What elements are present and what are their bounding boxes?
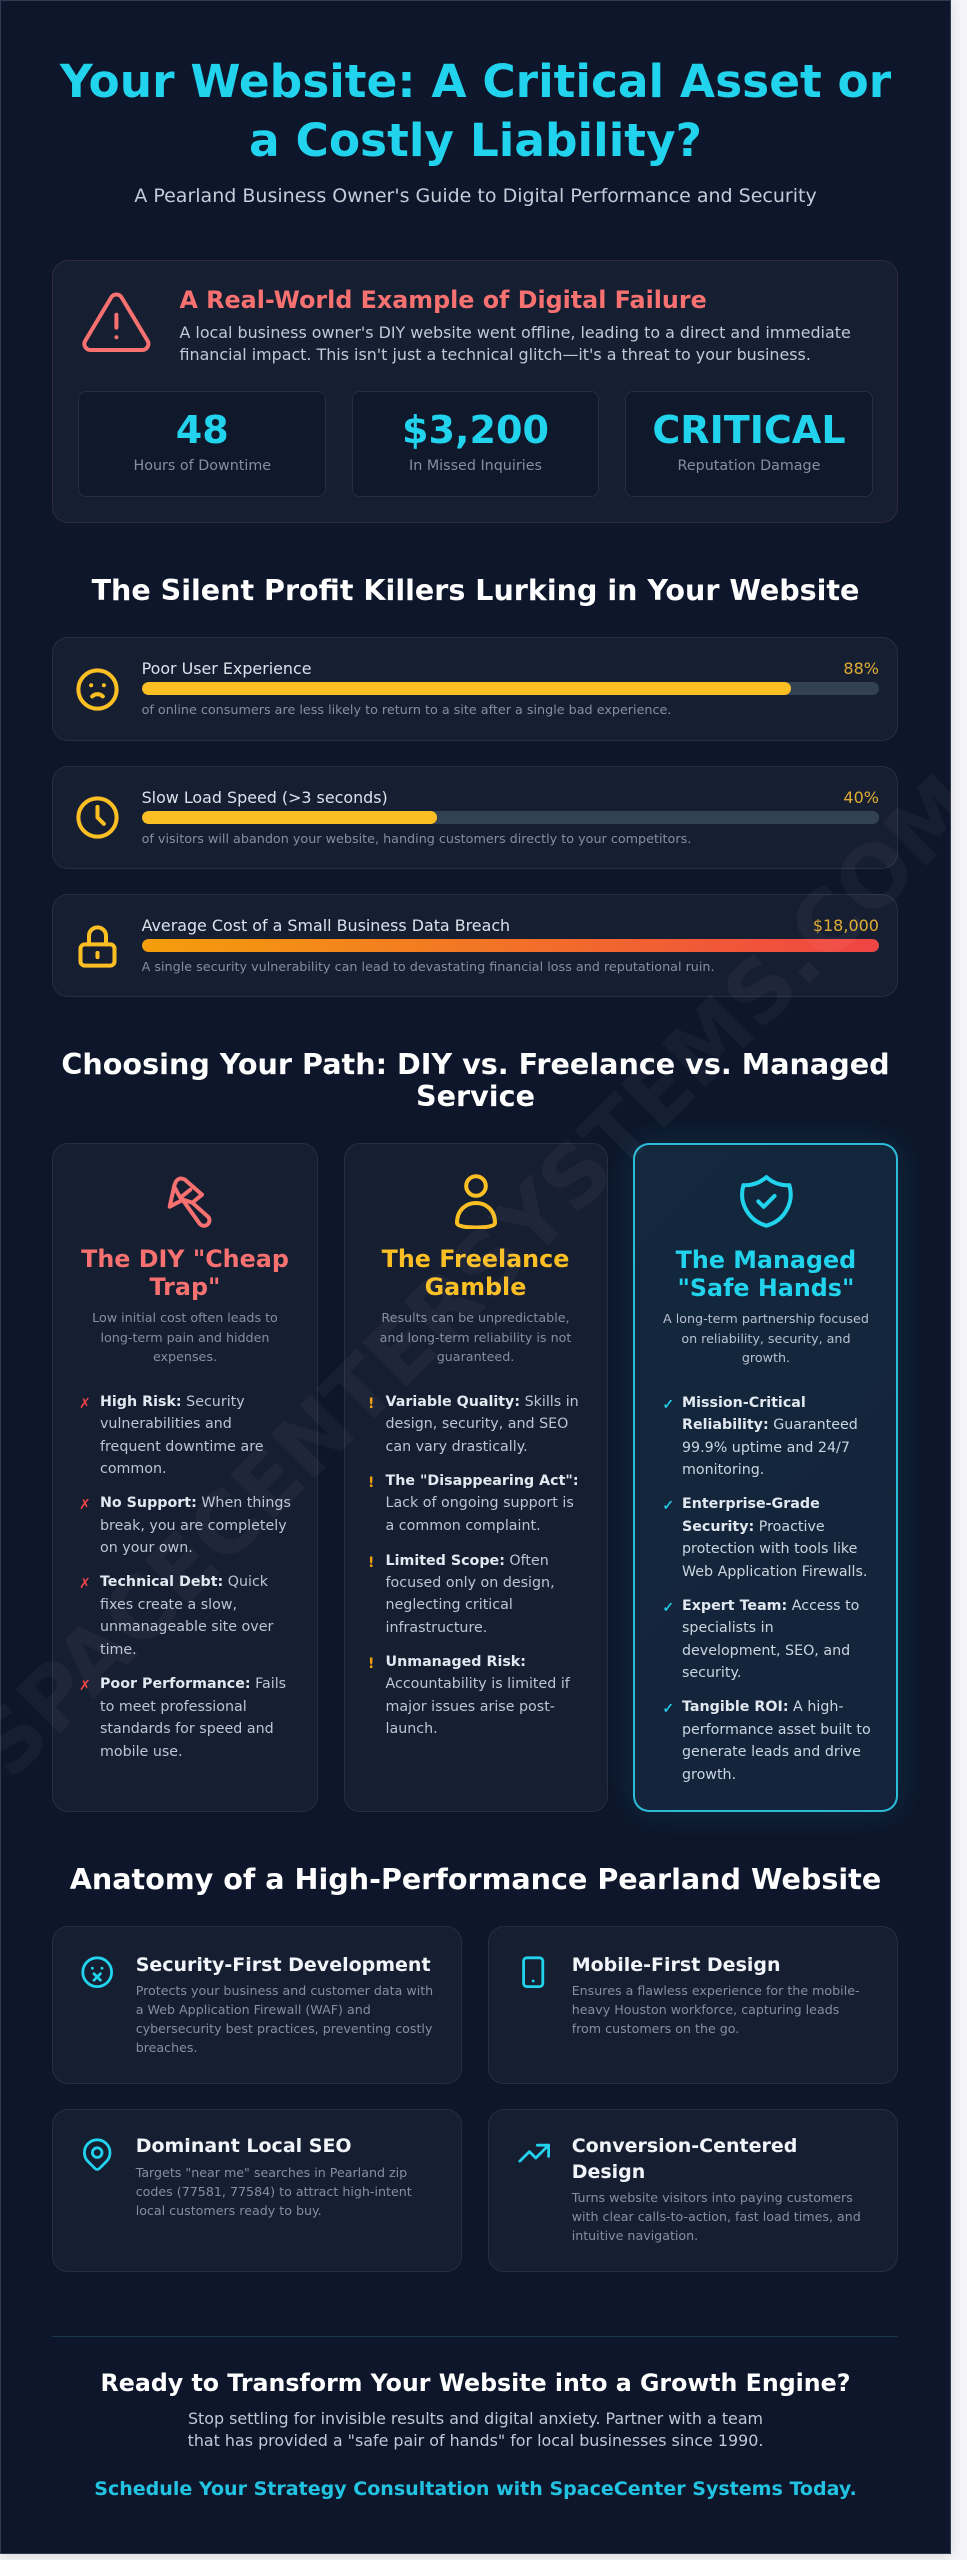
item text: break, you are completely <box>100 1518 287 1534</box>
list item <box>79 1394 264 1477</box>
item text <box>100 1574 274 1658</box>
feature text: local customers ready to buy. <box>136 2203 322 2218</box>
feature title <box>572 2134 797 2185</box>
stat: downtime <box>78 391 326 497</box>
item text: performance asset built to <box>682 1722 871 1738</box>
item text: Security: Proactive <box>682 1519 825 1535</box>
item text: fixes create a slow, <box>100 1597 237 1613</box>
call to action heading: Ready to Transform Your Website into a Growth Engine? <box>101 2369 850 2397</box>
list item <box>662 1598 859 1681</box>
feature text: Targets "near me" searches in Pearland zip <box>136 2165 407 2180</box>
call to action link: Schedule Your Strategy Consultation with SpaceCenter Systems Today. <box>94 2478 857 2500</box>
icon: shield check <box>740 1175 793 1228</box>
feature: mobile-first <box>488 1926 898 2084</box>
item text: Lack of ongoing support is <box>386 1495 574 1511</box>
panel text: financial impact. This isn't just a technical glitch—it's a threat to your business. <box>179 345 811 364</box>
card description: guaranteed. <box>437 1349 514 1364</box>
list item <box>368 1654 570 1737</box>
progress bar 40% <box>142 811 879 824</box>
list item <box>368 1473 579 1534</box>
call to action text: that has provided a "safe pair of hands" for local businesses since 1990. <box>188 2431 763 2450</box>
icon: phone <box>514 1953 552 1991</box>
card description: Low initial cost often leads to <box>92 1310 278 1325</box>
progress bar full <box>142 939 879 952</box>
list item <box>368 1394 579 1455</box>
stat value: 48 <box>176 408 229 452</box>
icon: hammer <box>168 1176 212 1228</box>
icon: lock <box>78 925 116 968</box>
subtitle: A Pearland Business Owner's Guide to Digital Performance and Security <box>134 185 817 207</box>
item text: launch. <box>386 1721 438 1737</box>
bullet: ✓ <box>662 1397 674 1413</box>
stat: missed inquiries <box>352 391 599 497</box>
value: $18,000 <box>813 916 879 935</box>
panel: DIY <box>52 1143 318 1812</box>
list item <box>662 1395 858 1478</box>
item text: Limited Scope: Often <box>386 1553 549 1569</box>
card description: A long-term partnership focused <box>663 1311 869 1326</box>
feature title: Conversion-Centered <box>572 2135 797 2157</box>
feature text: breaches. <box>136 2040 198 2055</box>
icon: warning triangle <box>82 292 150 352</box>
feature title: Security-First Development <box>136 1954 431 1976</box>
bullet: ✗ <box>79 1576 91 1592</box>
item text: No Support: When things <box>100 1495 291 1511</box>
item text: standards for speed and <box>100 1721 274 1737</box>
feature text <box>572 1981 860 2038</box>
description: A single security vulnerability can lead to devastating financial loss and reputational ruin. <box>142 960 715 975</box>
description: of online consumers are less likely to return to a site after a single bad experience. <box>142 703 671 718</box>
feature text <box>136 1981 433 2057</box>
stat value: CRITICAL <box>652 408 846 452</box>
feature text: Turns website visitors into paying customers <box>572 2190 853 2205</box>
item text: High Risk: Security <box>100 1394 245 1410</box>
item text: Poor Performance: Fails <box>100 1676 286 1692</box>
icon: clock <box>76 796 119 839</box>
icon: trending up <box>515 2134 553 2173</box>
progress bar 88% <box>142 682 879 695</box>
item text <box>682 1395 858 1478</box>
item text: a common complaint. <box>386 1518 541 1534</box>
item text <box>386 1553 555 1636</box>
feature text <box>572 2188 861 2246</box>
item text: Web Application Firewalls. <box>682 1564 867 1580</box>
item text: focused only on design, <box>386 1575 555 1591</box>
panel heading: A Real-World Example of Digital Failure <box>179 286 707 314</box>
stat: reputation <box>625 391 873 497</box>
card title: The DIY "Cheap <box>81 1245 289 1273</box>
feature text: intuitive navigation. <box>572 2228 698 2243</box>
list item <box>79 1495 291 1556</box>
bullet: ✓ <box>662 1600 674 1616</box>
item text <box>386 1473 579 1534</box>
item text: frequent downtime are <box>100 1439 264 1455</box>
card title: "Safe Hands" <box>677 1274 854 1302</box>
item text: neglecting critical <box>386 1597 513 1613</box>
icon: sad face <box>76 668 119 711</box>
list item <box>662 1699 871 1783</box>
feature text: Protects your business and customer data with <box>136 1983 433 1998</box>
item text: monitoring. <box>682 1462 764 1478</box>
item text: Reliability: Guaranteed <box>682 1417 858 1433</box>
card title: Trap" <box>150 1273 220 1301</box>
heading: anatomy: Anatomy of a High-Performance Pearland Website <box>70 1862 881 1896</box>
label: Slow Load Speed (>3 seconds) <box>142 788 388 807</box>
bullet: ✓ <box>662 1498 674 1514</box>
item text: Mission-Critical <box>682 1395 806 1411</box>
title <box>60 54 892 167</box>
bullet: ! <box>368 1656 374 1672</box>
feature text: cybersecurity best practices, preventing costly <box>136 2021 432 2036</box>
feature title: Mobile-First Design <box>572 1954 781 1976</box>
item text <box>682 1598 859 1681</box>
item text <box>386 1394 579 1455</box>
title: Your Website: A Critical Asset or <box>60 54 891 108</box>
item text: specialists in <box>682 1620 774 1636</box>
panel: real-world example <box>52 260 898 523</box>
list item <box>79 1676 286 1760</box>
icon: map pin <box>78 2135 117 2173</box>
item text: development, SEO, and <box>682 1642 850 1658</box>
bullet: ✗ <box>79 1678 91 1694</box>
stat label: Reputation Damage <box>678 458 820 474</box>
item text: infrastructure. <box>386 1620 487 1636</box>
call to action text: Stop settling for invisible results and digital anxiety. Partner with a team <box>188 2409 763 2428</box>
panel: poor user experience <box>52 637 898 740</box>
card description <box>92 1310 278 1364</box>
bullet: ! <box>368 1475 374 1491</box>
item text: security. <box>682 1665 741 1681</box>
item text: can vary drastically. <box>386 1439 528 1455</box>
item text: Variable Quality: Skills in <box>386 1394 579 1410</box>
item text: common. <box>100 1461 167 1477</box>
heading: choosing your path: Choosing Your Path: DIY vs. Freelance vs. Managed <box>61 1046 890 1080</box>
item text <box>386 1654 570 1737</box>
card title <box>81 1245 289 1301</box>
card description: and long-term reliability is not <box>380 1330 571 1345</box>
item text: to meet professional <box>100 1699 247 1715</box>
item text: major issues arise post- <box>386 1699 555 1715</box>
card title: Gamble <box>425 1273 526 1301</box>
feature text: with clear calls-to-action, fast load times, and <box>572 2209 861 2224</box>
item text: Unmanaged Risk: <box>386 1654 526 1670</box>
panel text: A local business owner's DIY website went offline, leading to a direct and immediate <box>179 323 851 342</box>
stat label: In Missed Inquiries <box>409 458 542 474</box>
feature: conversion <box>488 2109 898 2272</box>
item text <box>682 1496 867 1580</box>
card description: long-term pain and hidden <box>100 1330 269 1345</box>
card title <box>676 1246 856 1302</box>
item text: The "Disappearing Act": <box>386 1473 579 1489</box>
item text <box>100 1676 286 1760</box>
item text: unmanageable site over <box>100 1619 273 1635</box>
card description <box>380 1310 572 1364</box>
item text: generate leads and drive <box>682 1744 861 1760</box>
heading: choosing your path: Service <box>416 1078 535 1112</box>
card description <box>663 1311 869 1365</box>
bullet: ! <box>368 1396 374 1412</box>
item text: Expert Team: Access to <box>682 1598 859 1614</box>
stat label: Hours of Downtime <box>133 458 271 474</box>
panel: freelance <box>344 1143 608 1812</box>
stat value: $3,200 <box>402 408 549 452</box>
feature text: codes (77581, 77584) to attract high-intent <box>136 2184 412 2199</box>
list item <box>368 1553 555 1636</box>
label: Poor User Experience <box>142 659 312 678</box>
bullet: ✗ <box>79 1497 91 1513</box>
feature: local SEO <box>52 2109 462 2272</box>
list item <box>662 1496 867 1580</box>
feature text: a Web Application Firewall (WAF) and <box>136 2002 371 2017</box>
card description: growth. <box>742 1350 790 1365</box>
card description: Results can be unpredictable, <box>381 1310 570 1325</box>
description: of visitors will abandon your website, handing customers directly to your competitors. <box>142 832 691 847</box>
item text: vulnerabilities and <box>100 1416 232 1432</box>
feature: security-first <box>52 1926 462 2084</box>
card description: on reliability, security, and <box>681 1331 851 1346</box>
item text <box>682 1699 871 1783</box>
value: 40% <box>843 788 879 807</box>
card title: The Freelance <box>382 1245 569 1273</box>
item text: time. <box>100 1642 137 1658</box>
heading: profit killers: The Silent Profit Killers Lurking in Your Website <box>92 572 859 606</box>
bullet: ✓ <box>662 1701 674 1717</box>
item text: Accountability is limited if <box>386 1676 570 1692</box>
label: Average Cost of a Small Business Data Breach <box>142 916 510 935</box>
panel text <box>179 323 851 364</box>
feature text <box>136 2163 412 2220</box>
item text: 99.9% uptime and 24/7 <box>682 1440 850 1456</box>
title: a Costly Liability? <box>249 114 702 167</box>
heading: choosing your path <box>61 1046 890 1112</box>
item text: design, security, and SEO <box>386 1416 568 1432</box>
card title: The Managed <box>676 1246 856 1274</box>
feature text: from customers on the go. <box>572 2021 739 2036</box>
feature text: Ensures a flawless experience for the mobile- <box>572 1983 860 1998</box>
feature title: Dominant Local SEO <box>136 2135 352 2157</box>
bullet: ✗ <box>79 1396 91 1412</box>
icon: person <box>455 1174 497 1229</box>
card description: expenses. <box>153 1349 217 1364</box>
card title <box>382 1245 569 1301</box>
item text <box>100 1495 291 1556</box>
list item <box>79 1574 274 1658</box>
panel: data breach cost <box>52 894 898 997</box>
call to action text <box>0 2408 951 2452</box>
item text: on your own. <box>100 1540 193 1556</box>
panel: managed service <box>633 1143 898 1812</box>
item text: protection with tools like <box>682 1541 857 1557</box>
feature text: heavy Houston workforce, capturing leads <box>572 2002 839 2017</box>
icon: security face <box>78 1953 117 1991</box>
bullet: ! <box>368 1555 374 1571</box>
value: 88% <box>843 659 879 678</box>
panel: slow load speed <box>52 766 898 869</box>
item text: Enterprise-Grade <box>682 1496 820 1512</box>
item text: Technical Debt: Quick <box>100 1574 268 1590</box>
item text: mobile use. <box>100 1744 183 1760</box>
item text: growth. <box>682 1767 736 1783</box>
feature title: Design <box>572 2161 645 2183</box>
item text: Tangible ROI: A high- <box>682 1699 844 1715</box>
item text <box>100 1394 264 1477</box>
